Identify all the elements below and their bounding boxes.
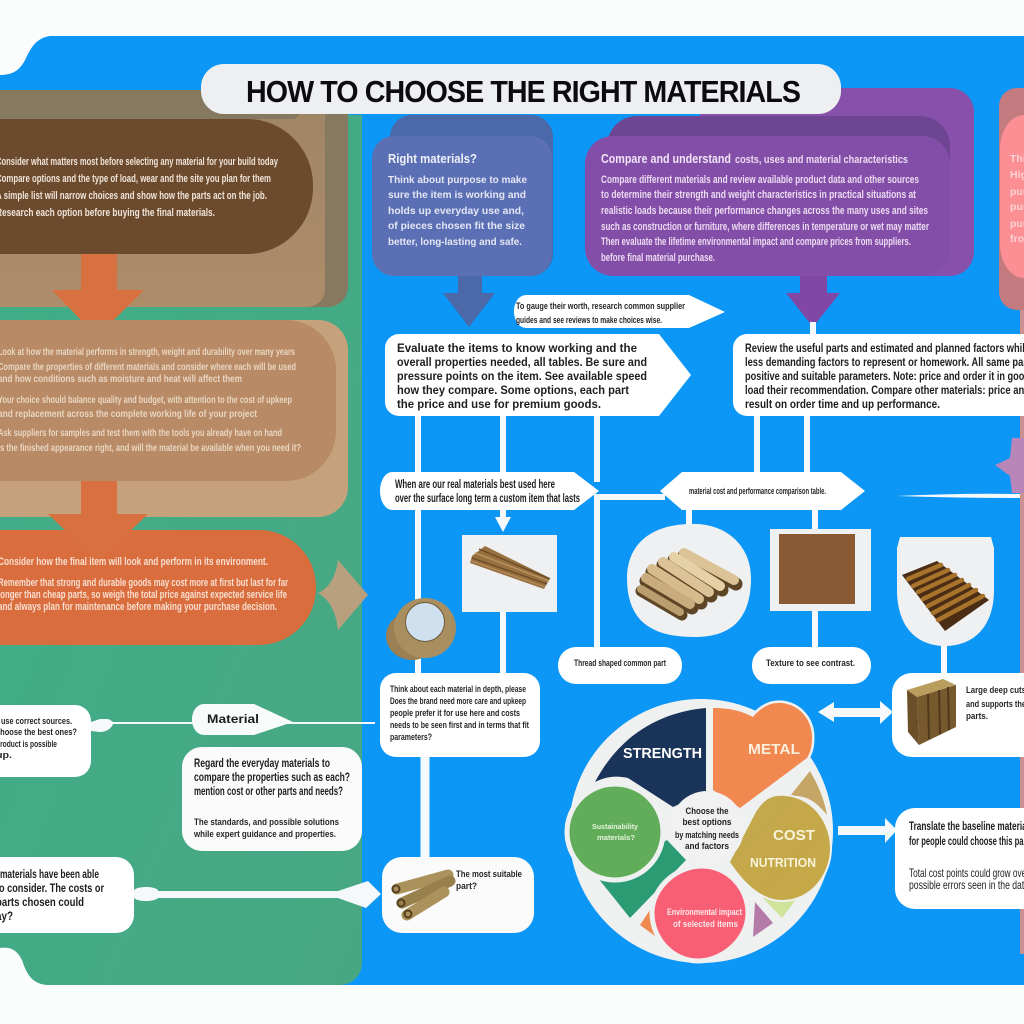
panel: tan details bbox=[0, 320, 348, 517]
panel: brown intro bbox=[0, 90, 348, 307]
brown pill text bbox=[0, 156, 279, 219]
blue panel text: of pieces chosen fit the size bbox=[388, 220, 525, 232]
label: centre text: and factors bbox=[685, 841, 729, 852]
label: metal: METAL bbox=[748, 741, 800, 758]
callout: wood rolls box: The most suitable bbox=[456, 869, 522, 880]
tan panel text bbox=[0, 347, 301, 454]
tan panel text: Look at how the material performs in strength, weight and durability over many years bbox=[0, 347, 295, 358]
blue panel text: Think about purpose to make bbox=[388, 174, 527, 186]
orange panel text: and always plan for maintenance before making your purchase decision. bbox=[0, 601, 277, 613]
panel: orange summary bbox=[0, 481, 316, 645]
label pill: thread: Thread shaped common part bbox=[574, 658, 667, 669]
orange panel text bbox=[0, 556, 289, 613]
blue panel heading: Right materials? bbox=[388, 152, 477, 166]
label: centre text: best options bbox=[682, 817, 732, 828]
callout: compare totals box bbox=[895, 808, 1024, 909]
icon: wood block bbox=[907, 679, 956, 745]
right pink strip bbox=[1020, 300, 1024, 954]
label: green circle text: materials? bbox=[597, 833, 635, 842]
callout: wood block box: parts. bbox=[966, 711, 988, 722]
arrow: blue down bbox=[443, 276, 495, 327]
callout: wood block box bbox=[892, 673, 1024, 757]
purple panel text: before final material purchase. bbox=[601, 252, 715, 264]
icon: disc bbox=[386, 598, 456, 660]
arrow: tan right bbox=[318, 560, 368, 630]
purple panel text: to determine their strength and weight characteristics in practical situations at bbox=[601, 189, 916, 201]
callout: left question box bbox=[182, 747, 362, 851]
purple panel heading: Compare and understand bbox=[601, 152, 731, 166]
callout: top arrow box: To gauge their worth, research common supplier bbox=[516, 301, 685, 312]
title: HOW TO CHOOSE THE RIGHT MATERIALS bbox=[246, 74, 800, 109]
label: centre text: by matching needs bbox=[675, 830, 739, 841]
callout: left question box: mention cost or other parts and needs? bbox=[194, 784, 343, 798]
segment: metal heart bbox=[713, 703, 812, 808]
callout: left question box: The standards, and possible solutions bbox=[194, 817, 339, 828]
blue panel text: better, long-lasting and safe. bbox=[388, 236, 522, 248]
label: strength: STRENGTH bbox=[623, 745, 702, 762]
chart: material factors wheel bbox=[567, 699, 833, 963]
callout: question arrow box: over the surface long term a custom item that lasts bbox=[395, 491, 580, 505]
callout: material notes box: parameters? bbox=[390, 732, 432, 743]
arrow: double white bbox=[818, 701, 893, 724]
callout: material notes box: needs to be seen first and in terms that fit bbox=[390, 720, 530, 731]
callout: left question box: compare the properties such as each? bbox=[194, 770, 350, 784]
label: pink circle text: of selected items bbox=[673, 919, 738, 929]
tan panel text: Your choice should balance quality and budget, with attention to the cost of upkeep bbox=[0, 395, 292, 406]
label: pentagon tag bbox=[192, 704, 293, 735]
callout: left box 2 bbox=[0, 857, 134, 933]
label pill: texture bbox=[752, 647, 871, 684]
blue panel text: holds up everyday use and, bbox=[388, 205, 524, 217]
blue panel text bbox=[388, 174, 527, 248]
label: pink circle text: Environmental impact bbox=[667, 907, 742, 917]
callout: top arrow box bbox=[514, 295, 725, 328]
callout: first requirements box: the price and use for premium goods. bbox=[397, 397, 601, 411]
green left column bbox=[0, 115, 362, 985]
segment: dark green bbox=[598, 840, 686, 918]
pink panel text bbox=[1010, 153, 1024, 245]
callout: wood rolls box bbox=[382, 857, 534, 933]
callout: left question box: Regard the everyday materials to bbox=[194, 756, 330, 770]
panel: purple options bbox=[585, 88, 974, 276]
callout: first requirements box bbox=[385, 334, 691, 416]
icon: star bbox=[995, 438, 1024, 493]
callout: top arrow box: guides and see reviews to make choices wise. bbox=[516, 315, 662, 326]
brown pill text: Research each option before buying the final materials. bbox=[0, 207, 215, 219]
purple panel text bbox=[601, 174, 930, 264]
arrow: orange down 2 bbox=[48, 481, 148, 562]
callout: material notes box bbox=[380, 673, 540, 757]
tan panel text: and replacement across the complete working life of your project bbox=[0, 409, 258, 420]
connector: pentagon line bbox=[91, 719, 375, 732]
callout: left question box: while expert guidance and properties. bbox=[193, 829, 336, 840]
callout: second requirements box bbox=[733, 334, 1024, 416]
panel: blue question bbox=[372, 115, 553, 276]
label: green circle text bbox=[592, 822, 639, 842]
tan panel text: and how conditions such as moisture and heat will affect them bbox=[0, 374, 242, 385]
brown pill bbox=[0, 119, 313, 254]
purple panel heading bbox=[601, 152, 908, 166]
segment: gold cost bbox=[730, 796, 830, 900]
segment: pink circle bbox=[652, 866, 748, 961]
callout: question arrow box bbox=[380, 472, 599, 510]
callout: left box 2: materials have been able bbox=[0, 867, 99, 881]
callout: material notes box: Does the brand need more care and upkeep bbox=[390, 696, 526, 707]
tan panel text: Is the finished appearance right, and will the material be available when you need it? bbox=[0, 443, 301, 454]
icon: wood slats card bbox=[462, 535, 557, 612]
segment: small orange bbox=[640, 907, 655, 936]
callout: material notes box: Think about each material in depth, please bbox=[390, 684, 526, 695]
brown pill text: Consider what matters most before selecting any material for your build today bbox=[0, 156, 279, 168]
arrow: white right bbox=[838, 818, 897, 843]
icon: wood logs card bbox=[627, 524, 751, 637]
segment: strength bbox=[595, 708, 706, 807]
callout: first requirements box: pressure points on the item. See available speed bbox=[397, 369, 647, 383]
panel: pink right bbox=[999, 88, 1024, 310]
orange panel text: Remember that strong and durable goods may cost more at first but last for far bbox=[0, 577, 289, 589]
label: cost: COST bbox=[773, 828, 815, 844]
title banner bbox=[201, 64, 841, 114]
segment: purple bbox=[753, 902, 773, 937]
callout: first requirements box: how they compare. Some options, each part bbox=[397, 383, 629, 397]
arrow: purple down bbox=[786, 276, 840, 327]
brown pill text: Compare options and the type of load, wear and the site you plan for them bbox=[0, 173, 271, 185]
callout: second requirements box: result on order time and up performance. bbox=[745, 397, 940, 411]
callout: compare hexagon bbox=[660, 472, 865, 510]
purple panel text: realistic loads because their performance changes across the many uses and sites bbox=[601, 205, 928, 217]
segment: centre circle bbox=[670, 791, 744, 865]
icon: wood rolls bbox=[392, 875, 450, 918]
horizontal connector to star bbox=[897, 494, 1020, 498]
icon: wood panel card bbox=[770, 529, 871, 611]
blue panel text: sure the item is working and bbox=[388, 189, 526, 201]
callout: left box 2: to consider. The costs or bbox=[0, 881, 104, 895]
callout: first requirements box: overall properties needed, all tables. Be sure and bbox=[397, 355, 647, 369]
flow connector lines bbox=[418, 322, 944, 860]
arrow: white down to wood bbox=[495, 510, 511, 532]
tan panel text: Compare the properties of different materials and consider where each will be used bbox=[0, 362, 296, 373]
top-left corner notch bbox=[0, 36, 50, 75]
brown pill text: A simple list will narrow choices and show how the parts act on the job. bbox=[0, 190, 267, 202]
purple panel text: Compare different materials and review available product data and other sources bbox=[601, 174, 919, 186]
label pill: texture: Texture to see contrast. bbox=[766, 658, 855, 669]
label pill: thread bbox=[558, 647, 682, 684]
arrow: orange down 1 bbox=[52, 254, 144, 337]
segment: green circle bbox=[567, 784, 663, 880]
label: pink circle text bbox=[667, 907, 742, 929]
label: green circle text: Sustainability bbox=[592, 822, 639, 831]
bottom-left corner notch bbox=[0, 948, 46, 990]
label: centre text: Choose the bbox=[686, 806, 728, 817]
icon: ribbed wood shield card bbox=[897, 537, 994, 646]
orange panel text: Consider how the final item will look and perform in its environment. bbox=[0, 556, 268, 568]
callout: material notes box: people prefer it for use here and costs bbox=[390, 708, 520, 719]
purple panel heading: costs, uses and material characteristics bbox=[735, 154, 908, 166]
label: nutrition: NUTRITION bbox=[750, 856, 816, 870]
tan panel text: Ask suppliers for samples and test them with the tools you already have on hand bbox=[0, 428, 282, 439]
callout: left box 1: use correct sources. bbox=[1, 716, 72, 727]
callout: wood rolls box: part? bbox=[456, 881, 477, 892]
callout: question arrow box: When are our real materials best used here bbox=[395, 477, 555, 491]
callout: compare hexagon: material cost and performance comparison table. bbox=[689, 486, 826, 497]
label: centre text bbox=[675, 806, 739, 852]
callout: left box 1 bbox=[0, 705, 91, 777]
orange panel text: longer than cheap parts, so weigh the total price against expected service life bbox=[0, 589, 287, 601]
segment: light green bbox=[763, 898, 797, 918]
label: pentagon tag: Material bbox=[207, 712, 259, 726]
segment: tan bbox=[790, 771, 827, 815]
connector: arrow to wood rolls bbox=[134, 881, 381, 908]
callout: first requirements box: Evaluate the items to know working and the bbox=[397, 341, 637, 355]
